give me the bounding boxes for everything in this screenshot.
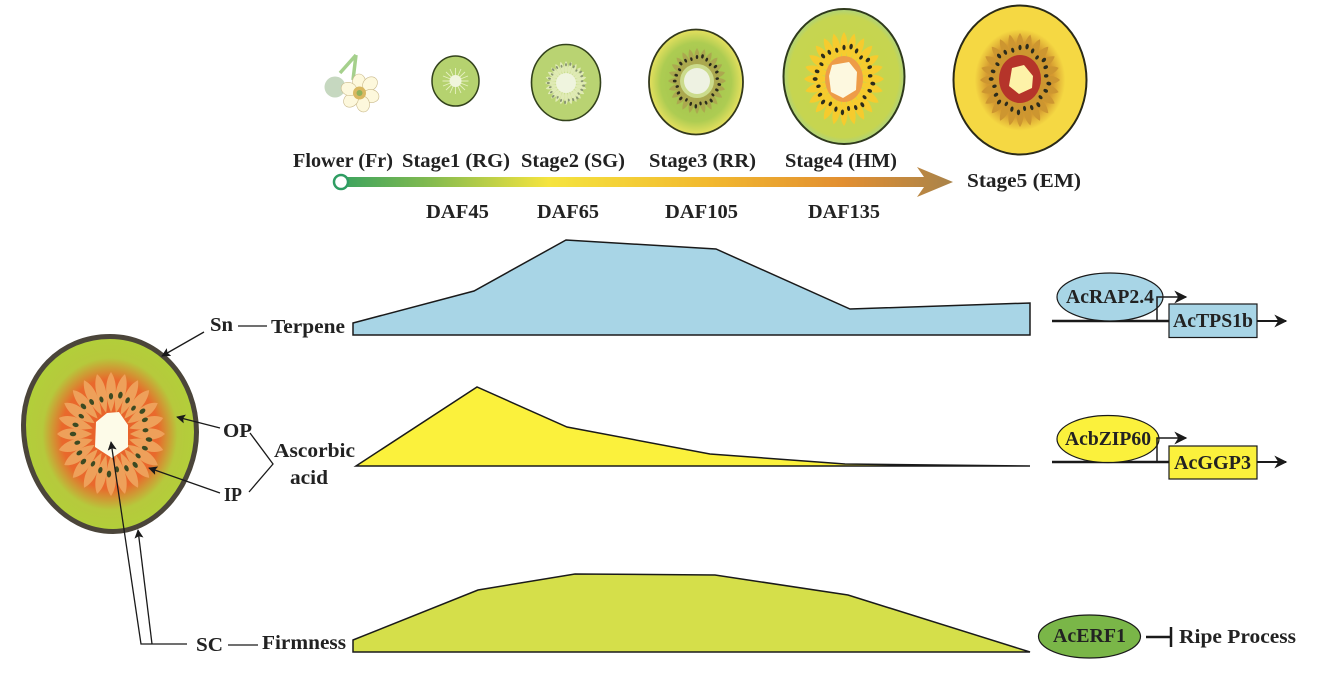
gene: AcRAP2.4 to AcTPS1b: AcTPS1b xyxy=(1173,310,1253,332)
icon: flower xyxy=(324,55,380,113)
timeline labels: Stage2 (SG) xyxy=(521,150,625,172)
gene: AcRAP2.4 to AcTPS1b xyxy=(1052,273,1286,338)
chart: firmness xyxy=(353,574,1030,652)
timeline labels: DAF135 xyxy=(808,201,880,223)
leader lines and arrows xyxy=(111,326,273,645)
callouts: tissue labels: Firmness xyxy=(262,632,346,654)
fruit cross-section xyxy=(24,336,196,532)
gene: AcRAP2.4 to AcTPS1b: AcRAP2.4 xyxy=(1066,286,1154,308)
callouts: tissue labels xyxy=(196,314,355,656)
fruit: stage 1 xyxy=(432,56,479,106)
gene: AcERF1 inhibits ripening: Ripe Process xyxy=(1179,626,1296,648)
callouts: tissue labels: IP xyxy=(224,484,242,506)
timeline arrow xyxy=(334,167,953,197)
callouts: tissue labels: Sn xyxy=(210,314,234,336)
gene: AcbZIP60 to AcGGP3: AcGGP3 xyxy=(1174,452,1251,474)
timeline labels xyxy=(293,150,1081,223)
chart: terpene xyxy=(353,240,1030,335)
timeline labels: DAF65 xyxy=(537,201,599,223)
timeline labels: Stage1 (RG) xyxy=(402,150,510,172)
timeline labels: Stage5 (EM) xyxy=(967,170,1081,192)
fruit: stage 4 xyxy=(784,9,904,144)
fruit: stage 5 xyxy=(954,6,1086,154)
callouts: tissue labels: OP xyxy=(223,420,252,442)
gene: AcbZIP60 to AcGGP3 xyxy=(1052,416,1286,479)
callouts: tissue labels: SC xyxy=(196,634,223,656)
timeline labels: DAF105 xyxy=(665,201,738,223)
gene: AcbZIP60 to AcGGP3: AcbZIP60 xyxy=(1065,428,1151,450)
callouts: tissue labels: acid xyxy=(290,467,329,489)
callouts: tissue labels: Ascorbic xyxy=(274,440,355,462)
core xyxy=(1009,65,1033,94)
gene: AcERF1 inhibits ripening: AcERF1 xyxy=(1053,625,1126,647)
chart: ascorbic acid xyxy=(356,387,1030,466)
core xyxy=(95,412,128,458)
gene: AcERF1 inhibits ripening xyxy=(1038,615,1296,658)
timeline labels: Stage3 (RR) xyxy=(649,150,756,172)
fruit: stage 3 xyxy=(649,30,743,134)
timeline labels: DAF45 xyxy=(426,201,489,223)
timeline labels: Flower (Fr) xyxy=(293,150,393,172)
core xyxy=(829,62,857,98)
callouts: tissue labels: Terpene xyxy=(271,316,345,338)
timeline labels: Stage4 (HM) xyxy=(785,150,897,172)
fruit: stage 2 xyxy=(532,44,600,120)
